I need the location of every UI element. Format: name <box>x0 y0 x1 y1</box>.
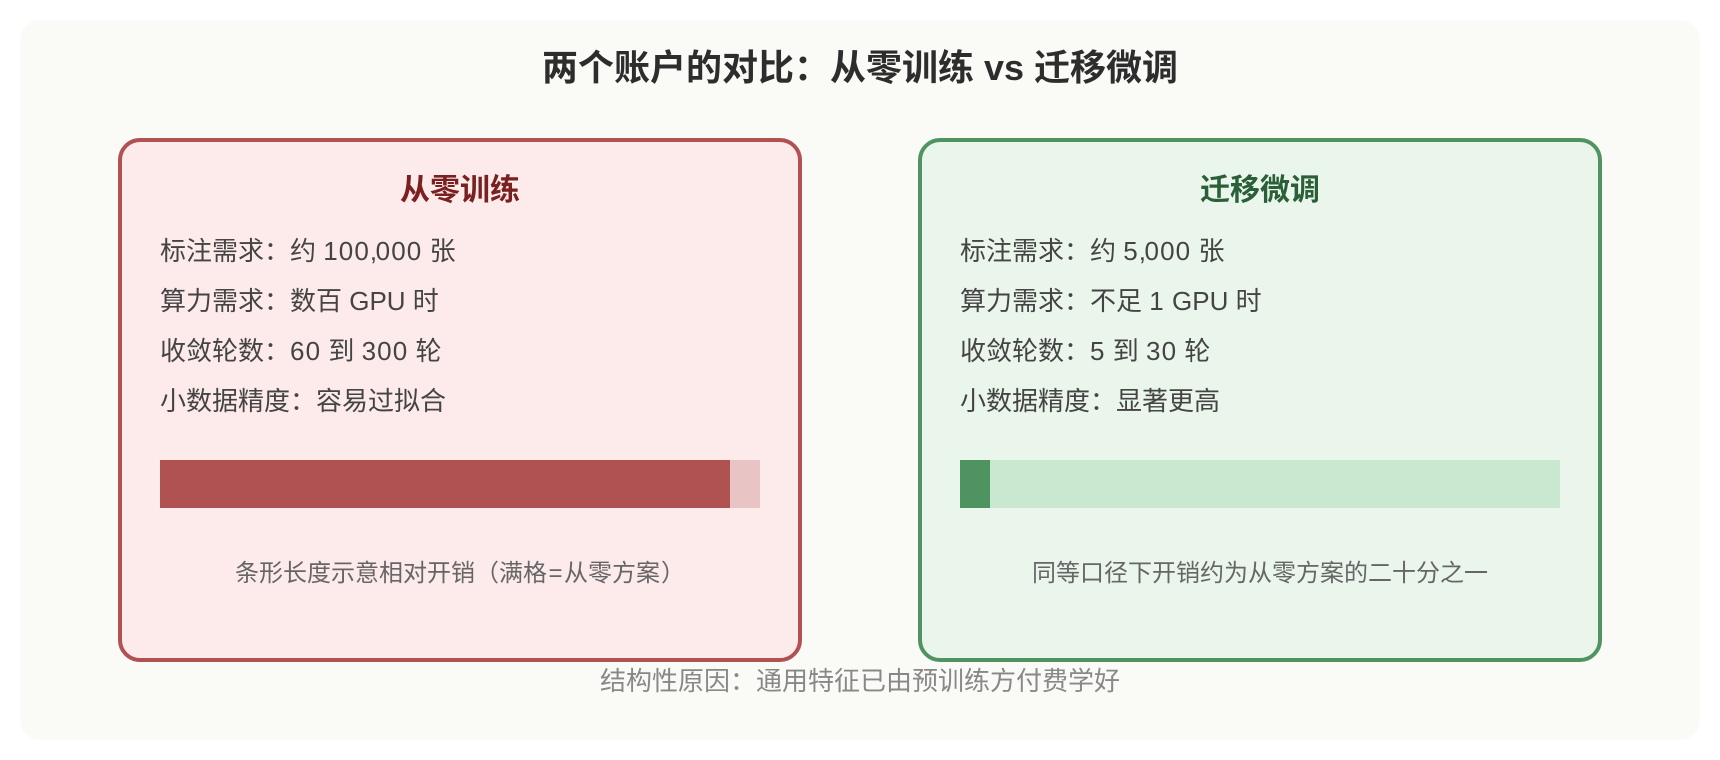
caption: from-scratch bar: ） <box>661 560 685 587</box>
text block: fine-tuning metrics: 标注需求：约 5,000 张 <box>960 236 1224 266</box>
panel heading: from-scratch: 从零训练 <box>400 174 520 207</box>
caption: fine-tuning bar: 同等口径下开销约为从零方案的二十分之一 <box>1032 560 1488 587</box>
panel: transfer fine-tuning <box>920 140 1600 660</box>
text block: fine-tuning metrics: 算力需求：不足 1 GPU 时 <box>960 286 1262 316</box>
text block: fine-tuning metrics: 小数据精度：显著更高 <box>960 386 1220 416</box>
bar chart: from-scratch relative cost <box>160 460 760 508</box>
text block: from-scratch metrics: 小数据精度：容易过拟合 <box>160 386 446 416</box>
caption: from-scratch bar: = <box>548 560 563 587</box>
panel background: from-scratch <box>120 140 800 660</box>
caption: from-scratch bar: （满格 <box>475 560 547 587</box>
panel background: fine-tuning <box>920 140 1600 660</box>
caption: from-scratch bar: 条形长度示意相对开销 <box>235 560 475 587</box>
bar chart: fine-tuning relative cost <box>960 460 1560 508</box>
text block: fine-tuning metrics <box>960 236 1262 416</box>
footnote: structural reason: 结构性原因：通用特征已由预训练方付费学好 <box>600 666 1120 696</box>
text block: from-scratch metrics: 收敛轮数：60 到 300 轮 <box>160 336 442 366</box>
text block: from-scratch metrics <box>160 236 456 416</box>
caption: from-scratch bar: 从零方案 <box>564 560 660 587</box>
panel heading: fine-tuning: 迁移微调 <box>1200 174 1320 207</box>
text block: from-scratch metrics: 算力需求：数百 GPU 时 <box>160 286 439 316</box>
panel: from-scratch training <box>120 140 800 660</box>
text block: from-scratch metrics: 标注需求：约 100,000 张 <box>160 236 456 266</box>
title: 两个账户的对比：从零训练 vs 迁移微调 <box>542 47 1178 88</box>
text block: fine-tuning metrics: 收敛轮数：5 到 30 轮 <box>960 336 1210 366</box>
